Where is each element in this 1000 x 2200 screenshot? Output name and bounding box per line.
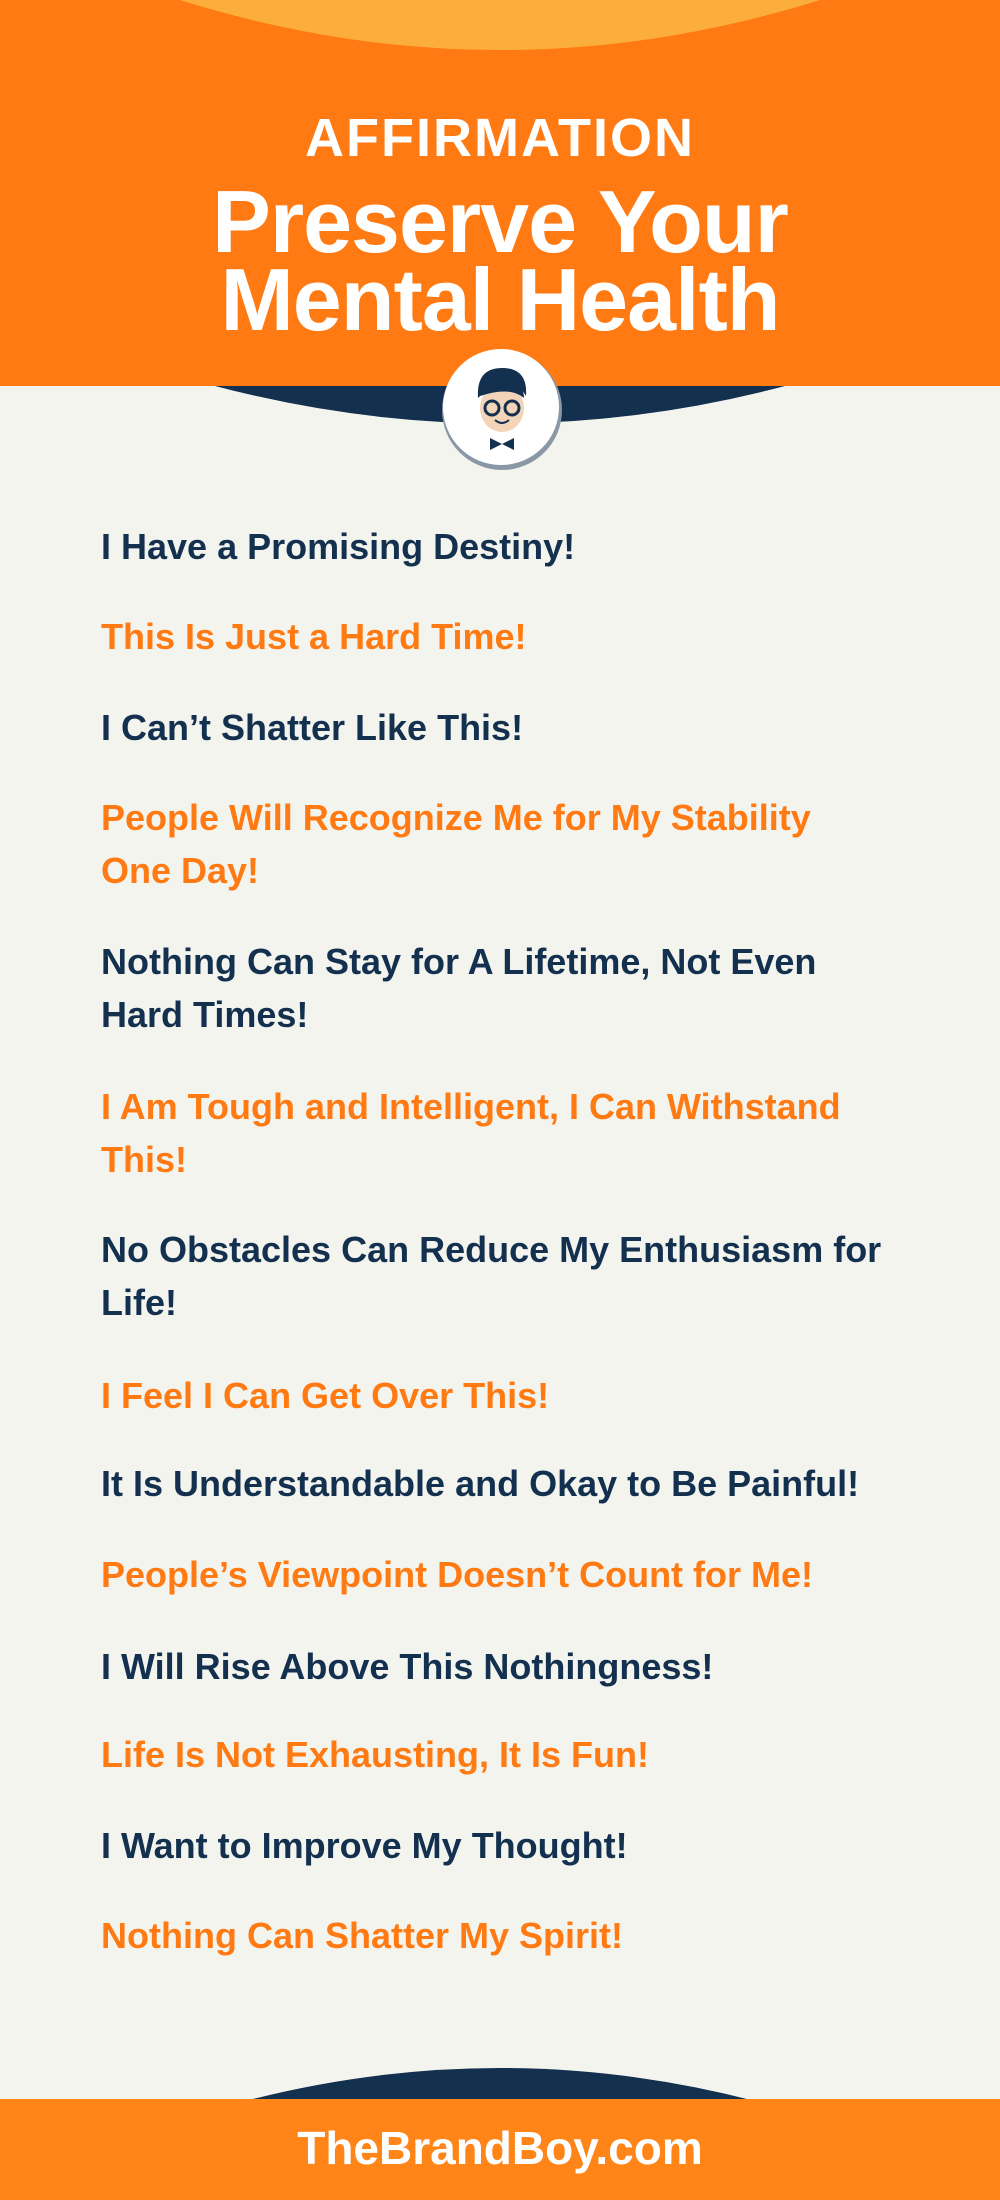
title: Mental Health: [220, 250, 780, 349]
list of affirmations: No Obstacles Can Reduce My Enthusiasm for: [101, 1229, 881, 1270]
list of affirmations: Life!: [101, 1282, 177, 1323]
icon: avatar: [442, 349, 562, 470]
list of affirmations: This Is Just a Hard Time!: [101, 616, 526, 657]
decorative top arc: [180, 0, 820, 50]
list of affirmations: Nothing Can Stay for A Lifetime, Not Even: [101, 941, 816, 982]
header: [0, 0, 1000, 386]
list of affirmations: Life Is Not Exhausting, It Is Fun!: [101, 1734, 649, 1775]
list of affirmations: [101, 526, 881, 1956]
list of affirmations: I Am Tough and Intelligent, I Can Withstand: [101, 1086, 841, 1127]
list of affirmations: I Feel I Can Get Over This!: [101, 1375, 549, 1416]
list of affirmations: I Want to Improve My Thought!: [101, 1825, 628, 1866]
footer: [0, 2099, 1000, 2200]
title: [212, 172, 788, 349]
list of affirmations: Hard Times!: [101, 994, 308, 1035]
navy wave under header: [215, 386, 785, 422]
list of affirmations: One Day!: [101, 850, 259, 891]
list of affirmations: I Will Rise Above This Nothingness!: [101, 1646, 713, 1687]
subtitle: AFFIRMATION: [305, 108, 695, 168]
footer text: TheBrandBoy.com: [297, 2122, 703, 2174]
navy wave above footer: [253, 2068, 746, 2099]
list of affirmations: I Can’t Shatter Like This!: [101, 707, 523, 748]
title: Preserve Your: [212, 172, 788, 271]
list of affirmations: This!: [101, 1139, 187, 1180]
list of affirmations: Nothing Can Shatter My Spirit!: [101, 1915, 623, 1956]
list of affirmations: People’s Viewpoint Doesn’t Count for Me!: [101, 1554, 813, 1595]
list of affirmations: I Have a Promising Destiny!: [101, 526, 575, 567]
list of affirmations: People Will Recognize Me for My Stability: [101, 797, 811, 838]
list of affirmations: It Is Understandable and Okay to Be Painful!: [101, 1463, 859, 1504]
